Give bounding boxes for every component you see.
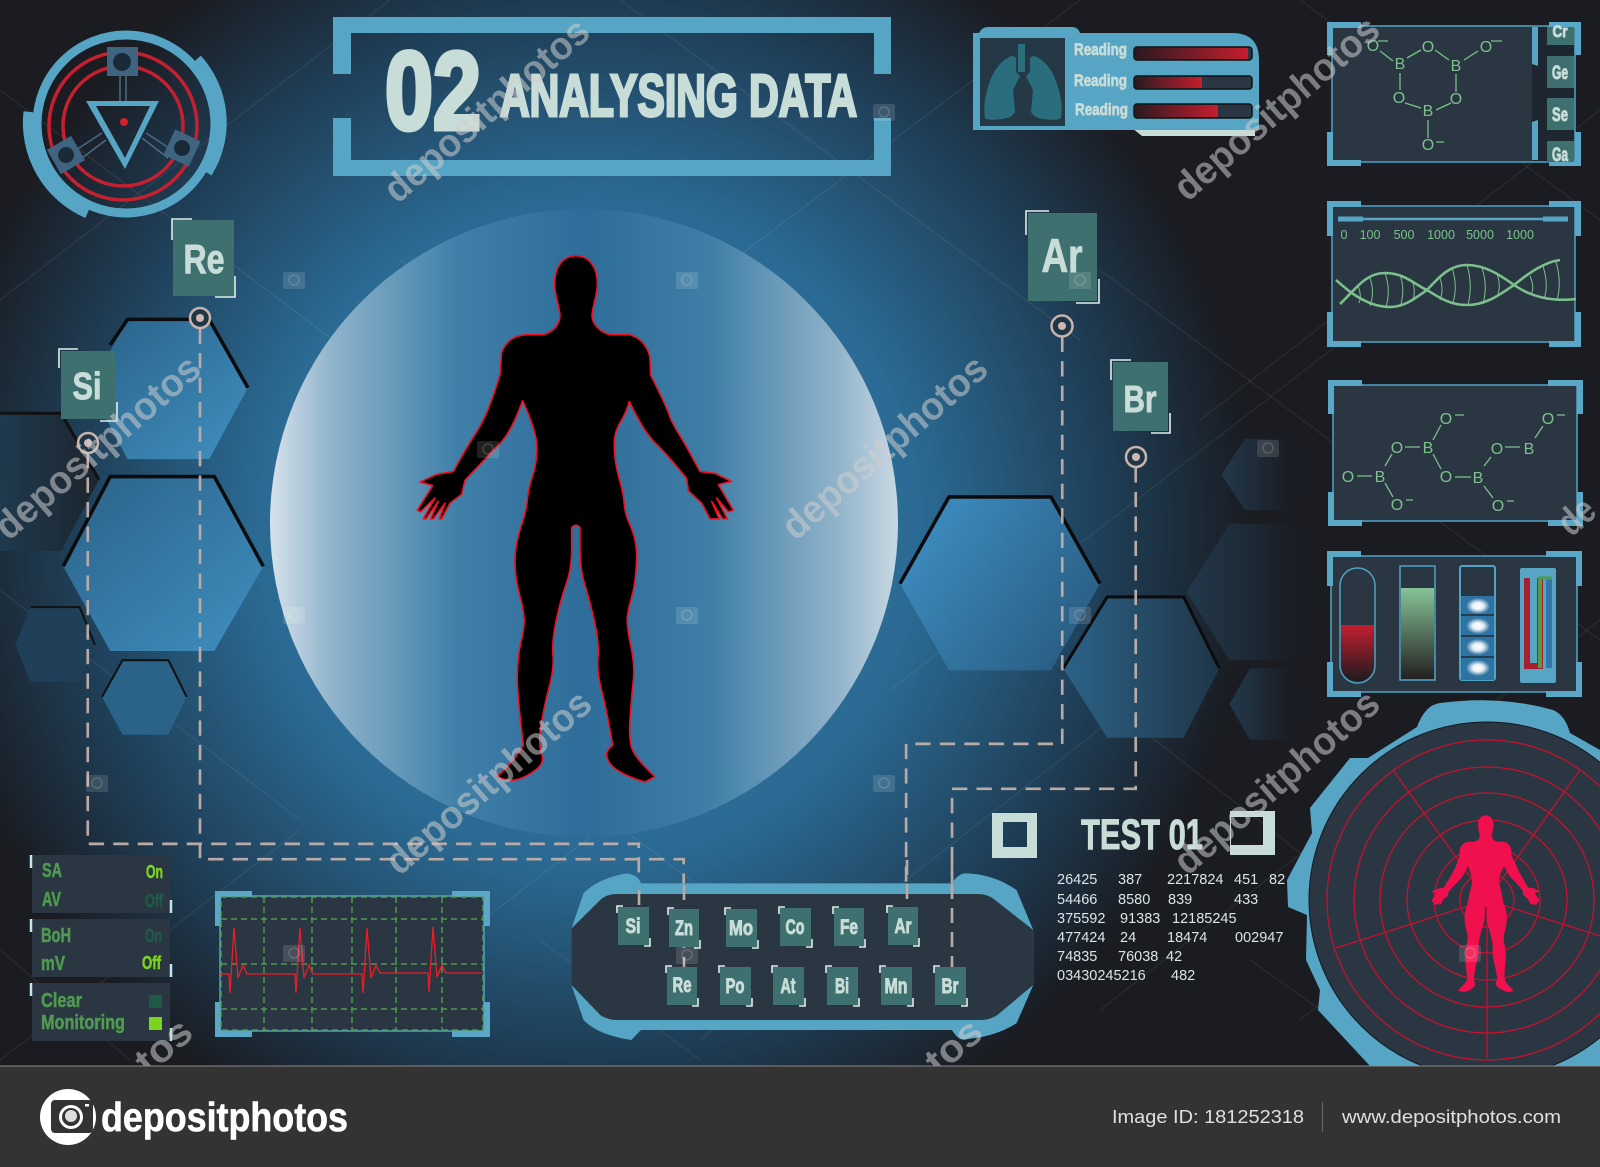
tray cards: bottom row: Bi: [835, 975, 849, 998]
title frame: [333, 17, 891, 176]
green tube: [1400, 566, 1435, 680]
data table: 2217824: [1167, 872, 1223, 888]
human figure silhouette: [417, 256, 733, 782]
molecule: boron ring: B: [1395, 56, 1405, 73]
red capsule: [1340, 568, 1375, 683]
title text: ANALYSING DATA: [500, 63, 857, 129]
tray dashed drop lines: [639, 860, 952, 1002]
status list panels: SA: [42, 860, 62, 882]
data table: 482: [1171, 968, 1195, 984]
data table: 82: [1269, 872, 1285, 888]
panel: ring formula with element cards: [1330, 22, 1578, 166]
scale labels: 1000: [1427, 228, 1455, 242]
molecule: boron ring: O: [1393, 90, 1405, 107]
central sphere: [270, 209, 898, 837]
data table: 91383: [1120, 911, 1160, 927]
data table: 451: [1234, 872, 1258, 888]
data table: 12185245: [1172, 911, 1237, 927]
colour bars: [1520, 568, 1556, 683]
scale labels: 5000: [1466, 228, 1494, 242]
data table: 839: [1168, 892, 1192, 908]
status list panels: mV: [41, 953, 66, 975]
molecule: boron ring: [1367, 38, 1502, 154]
watermarks: depositphotos: [773, 347, 996, 548]
element cards: [1547, 22, 1574, 166]
data table: [1057, 872, 1285, 984]
panel: chain formula: [1331, 383, 1580, 523]
footer bar: [0, 1066, 1600, 1167]
scale labels: 0: [1341, 228, 1348, 242]
connector target circles: [78, 308, 1146, 467]
molecule: boron chain: B: [1524, 441, 1534, 458]
hexagon cluster: right: [900, 439, 1327, 740]
data table: 74835: [1057, 949, 1097, 965]
reading bars: Reading: [1074, 71, 1127, 90]
molecule: boron chain: O: [1440, 411, 1452, 428]
footer logo wordmark: depositphotos: [101, 1094, 348, 1140]
molecule: boron chain: O: [1492, 498, 1504, 515]
title number: 02: [385, 30, 481, 153]
element cards: large: Re: [184, 236, 224, 282]
lung readings panel: [973, 27, 1259, 136]
status list panels: AV: [42, 889, 61, 911]
data table: 26425: [1057, 872, 1097, 888]
molecule: boron chain: O: [1542, 411, 1554, 428]
tray cards: bottom row: At: [780, 975, 796, 998]
test readout: TEST 01: [1081, 811, 1203, 859]
scale labels: 100: [1360, 228, 1380, 242]
element cards: large: Si: [72, 366, 102, 408]
dashed connector lines: [88, 329, 1136, 1005]
tray cards: top row: [617, 906, 919, 948]
tray cards: top row: Si: [626, 915, 640, 938]
tray cards: bottom row: Mn: [884, 975, 908, 998]
ECG trace: [220, 927, 482, 993]
reading bars: [1074, 40, 1252, 119]
test readout: [992, 811, 1285, 984]
status list panels: On: [145, 926, 162, 946]
reading bars: Reading: [1075, 100, 1128, 119]
DNA helix: [1336, 260, 1576, 307]
tray cards: bottom row: Re: [672, 974, 692, 997]
status list panels: Monitoring: [41, 1012, 125, 1034]
molecule: boron chain: B: [1473, 470, 1483, 487]
data table: 375592: [1057, 911, 1105, 927]
element cards: Ga: [1552, 145, 1568, 166]
element cards: large: Br: [1124, 379, 1157, 421]
status list panels: Clear: [41, 990, 82, 1012]
tray cards: bottom row: Po: [726, 975, 744, 998]
molecule: boron chain: O: [1391, 440, 1403, 457]
molecule: boron chain: [1342, 411, 1565, 515]
data table: 42: [1166, 949, 1182, 965]
panel: test tubes: [1330, 554, 1579, 694]
molecule: boron chain: B: [1423, 440, 1433, 457]
data table: 18474: [1167, 930, 1207, 946]
hexagon cluster: left: [0, 319, 263, 735]
tray cards: bottom row: [666, 966, 967, 1006]
tray cards: top row: Co: [786, 916, 804, 939]
tray cards: top row: Fe: [840, 916, 858, 939]
data table: 24: [1120, 930, 1136, 946]
ECG monitor: [218, 894, 487, 1034]
data table: 387: [1118, 872, 1142, 888]
status list panels: [31, 855, 171, 1041]
status list panels: Off: [142, 953, 162, 973]
molecule: boron ring: B: [1423, 103, 1433, 120]
watermarks: depositphotos: [375, 10, 598, 211]
element cards: large: [59, 211, 1170, 433]
footer logo icon: [40, 1089, 96, 1145]
data table: 433: [1234, 892, 1258, 908]
element cards: Cr: [1552, 22, 1568, 41]
molecule: boron chain: O: [1491, 441, 1503, 458]
periodic element tray: [572, 860, 1033, 1040]
scale labels: 500: [1394, 228, 1414, 242]
molecule: boron chain: O: [1440, 469, 1452, 486]
data table: 54466: [1057, 892, 1097, 908]
element cards: Ge: [1552, 63, 1568, 84]
scale labels: 1000: [1506, 228, 1534, 242]
watermarks: depositphotos: [1165, 8, 1388, 209]
data table: 03430245216: [1057, 968, 1146, 984]
reading bars: Reading: [1074, 40, 1127, 59]
tray cards: top row: Zn: [675, 917, 693, 940]
data table: 002947: [1235, 930, 1283, 946]
radar body scanner: [1287, 700, 1600, 1078]
icon: lungs: [980, 38, 1065, 126]
data table: 8580: [1118, 892, 1150, 908]
status list panels: BoH: [41, 925, 71, 947]
icon: right bracket square: [1230, 811, 1275, 855]
data table: 76038: [1118, 949, 1158, 965]
molecule: boron ring: O: [1450, 91, 1462, 108]
molecule: boron ring: O: [1422, 137, 1434, 154]
tray cards: top row: Mo: [729, 917, 753, 940]
website: www.depositphotos.com: [1341, 1106, 1561, 1127]
molecule: boron ring: O: [1480, 39, 1492, 56]
element cards: Se: [1552, 105, 1568, 126]
watermarks: depositphotos: [377, 682, 600, 883]
icon: left bracket square: [992, 813, 1037, 858]
panel: DNA scale: [1330, 204, 1578, 344]
image id: Image ID: 181252318: [1112, 1106, 1304, 1127]
red body: [1432, 816, 1539, 992]
status list panels: On: [146, 862, 163, 882]
molecule: boron chain: B: [1375, 469, 1385, 486]
watermarks: depositphotos: [1165, 682, 1388, 883]
watermarks: tos: [126, 1010, 201, 1083]
molecule: boron ring: O: [1422, 39, 1434, 56]
molecule: boron ring: B: [1451, 58, 1461, 75]
element cards: large: Ar: [1042, 229, 1082, 282]
radar rings and spokes: [1327, 740, 1600, 1060]
scale labels: [1341, 228, 1534, 242]
molecule: boron ring: O: [1367, 38, 1379, 55]
molecule: boron chain: O: [1342, 469, 1354, 486]
glowing dots tube: [1460, 566, 1495, 680]
tray cards: top row: Ar: [894, 915, 912, 938]
data table: 477424: [1057, 930, 1105, 946]
emblem: reactor dial: [29, 35, 220, 213]
status list panels: Off: [145, 891, 164, 911]
tray cards: bottom row: Br: [942, 975, 958, 998]
watermark camera icons: [86, 104, 1481, 964]
watermarks: tos: [916, 1010, 991, 1083]
molecule: boron chain: O: [1391, 497, 1403, 514]
